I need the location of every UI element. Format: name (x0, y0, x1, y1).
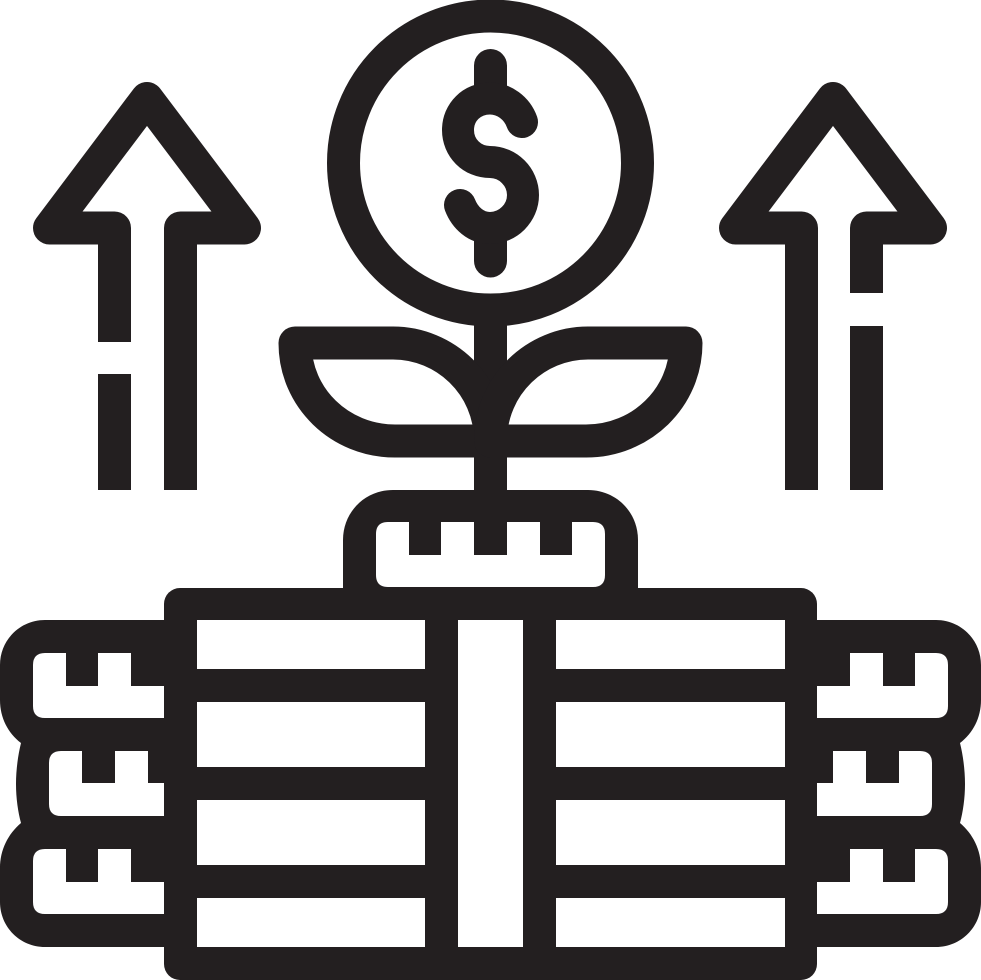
paper band (458, 620, 523, 947)
leaf: right (490, 343, 686, 441)
plant stem (474, 320, 507, 495)
banknote rows: left (197, 620, 425, 947)
coin stack: left (0, 620, 170, 947)
coin stack: right (811, 620, 981, 947)
arrow: right upward (736, 98, 930, 490)
leaf: left (295, 343, 490, 441)
coin pot at plant base (343, 490, 638, 590)
icon: coin with dollar sign (344, 16, 638, 310)
coin ring (344, 16, 638, 310)
banknote bundle (164, 588, 817, 980)
banknote rows: right (556, 620, 785, 947)
arrow: left upward (50, 98, 244, 490)
icon: dollar sign (458, 66, 523, 261)
